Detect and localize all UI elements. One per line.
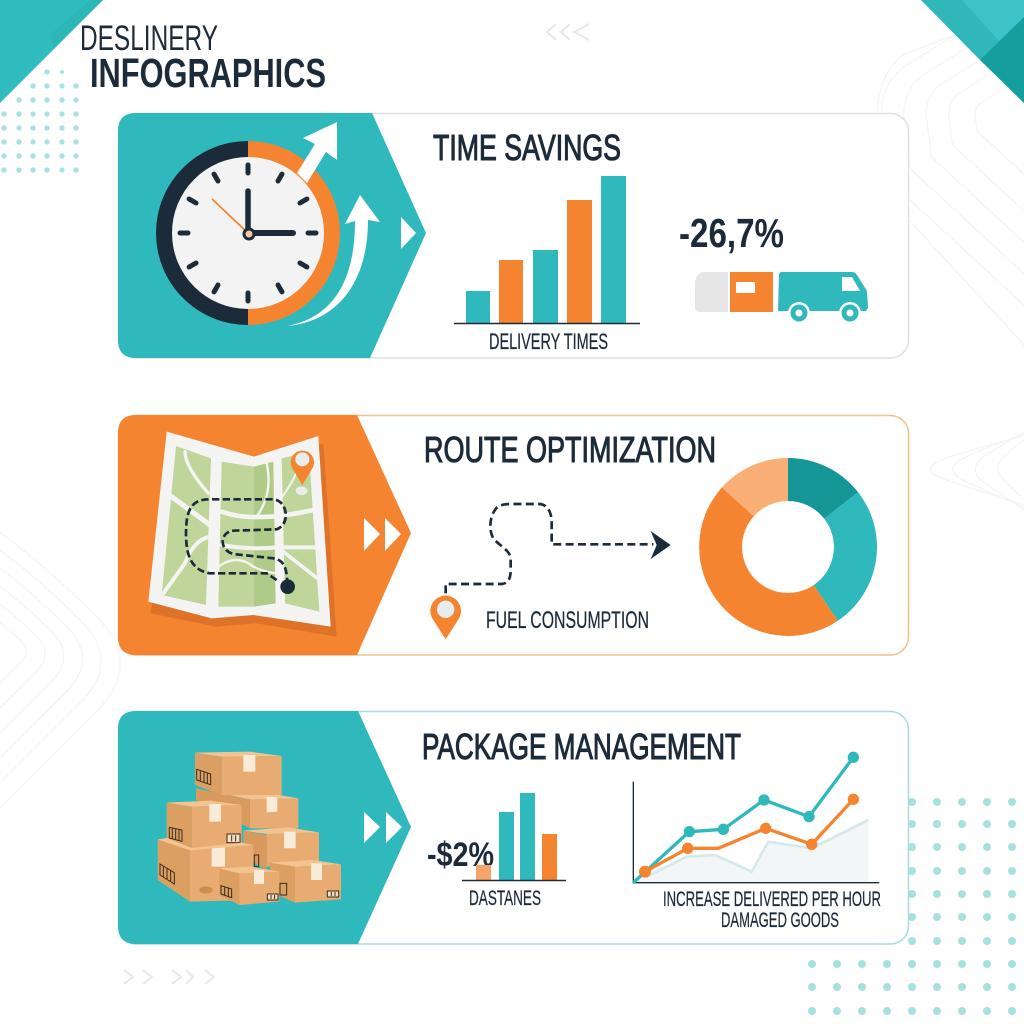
donut chart <box>699 458 877 636</box>
chart label: dastanes: DASTANES <box>469 887 541 910</box>
icon: clock <box>156 141 340 325</box>
dot pattern: top left <box>1 69 79 173</box>
chevrons marker <box>364 812 402 843</box>
icon: location pin <box>430 596 461 639</box>
panel: route optimization <box>118 415 908 655</box>
icon: folded map <box>148 432 337 637</box>
label: fuel consumption: FUEL CONSUMPTION <box>486 607 649 634</box>
route line with arrow <box>446 504 671 593</box>
heading: route optimization: ROUTE OPTIMIZATION <box>424 429 716 470</box>
chevron marker <box>401 217 416 249</box>
corner decoration: top right <box>921 0 1024 103</box>
title: DESLINERY <box>80 19 218 58</box>
panel header arrow shape <box>118 711 411 944</box>
corner decoration: top left <box>0 0 103 103</box>
bar chart: delivery times <box>454 176 640 324</box>
line chart <box>633 752 879 883</box>
chevrons marker <box>364 518 401 551</box>
arrow: upward curved <box>287 195 380 326</box>
bar chart: dastanes <box>462 793 566 880</box>
dot pattern: bottom right <box>808 798 1016 1015</box>
chart label: damaged goods: DAMAGED GOODS <box>721 909 839 932</box>
title <box>80 19 326 96</box>
icon: stack of boxes <box>158 752 341 905</box>
panel header arrow shape <box>118 113 426 358</box>
icon: delivery truck <box>695 272 868 324</box>
chart label: increase delivered per hour: INCREASE DELIVERED PER HOUR <box>663 888 881 911</box>
title: INFOGRAPHICS <box>90 50 326 96</box>
stat: -26,7%: -26,7% <box>679 210 784 256</box>
panel: package management <box>118 711 908 944</box>
panel header arrow shape <box>118 415 411 655</box>
chart label: delivery times: DELIVERY TIMES <box>489 329 608 354</box>
heading: time savings: TIME SAVINGS <box>433 127 621 168</box>
heading: package management: PACKAGE MANAGEMENT <box>422 726 741 767</box>
arrow: upward straight <box>297 122 337 183</box>
panel: time savings <box>118 113 908 358</box>
stat: -$2%: -$2% <box>427 836 494 874</box>
